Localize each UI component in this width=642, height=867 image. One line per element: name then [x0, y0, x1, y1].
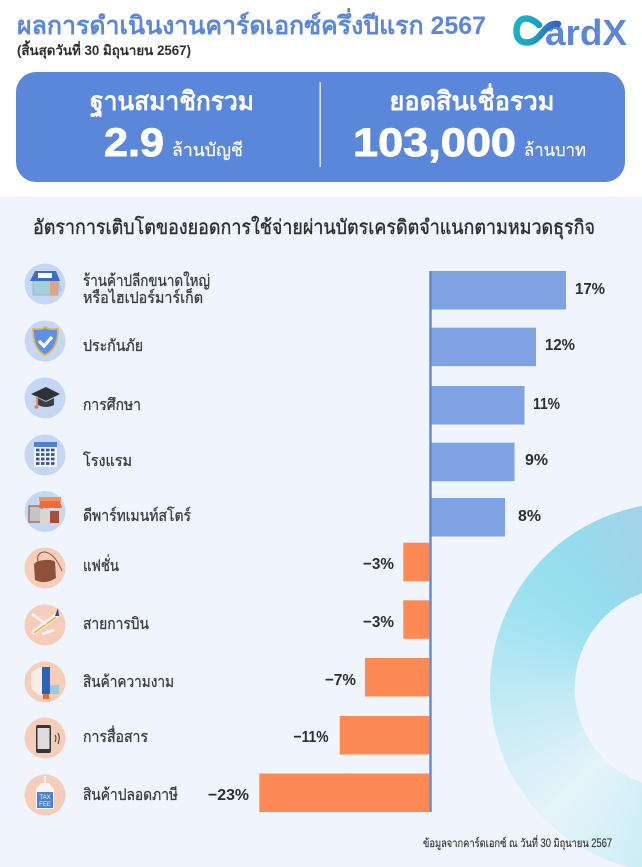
value: 17%: 17%	[575, 281, 605, 298]
chart axis	[429, 271, 432, 812]
bar: telecom -11%	[340, 716, 429, 754]
value: 9%: 9%	[525, 452, 548, 469]
icon: hotel	[24, 434, 66, 476]
bar: department store 8%	[431, 498, 505, 536]
value: -7%: −7%	[325, 672, 356, 689]
label: fashion: แฟชั่น	[83, 554, 119, 575]
label: retail: ร้านค้าปลีกขนาดใหญ่	[83, 271, 210, 290]
bar: duty free -23%	[259, 774, 429, 812]
stat heading: members: ฐานสมาชิกรวม	[90, 86, 254, 119]
label: insurance: ประกันภัย	[83, 338, 143, 355]
bar: insurance 12%	[431, 328, 536, 366]
label: duty free: สินค้าปลอดภาษี	[83, 786, 178, 804]
label: hotel: โรงแรม	[83, 451, 132, 470]
title: ผลการดำเนินงานคาร์ดเอกซ์ครึ่งปีแรก 2567	[17, 8, 486, 40]
icon: smartphone	[24, 718, 66, 758]
panel: summary banner	[16, 72, 625, 182]
bar: education 11%	[431, 386, 524, 424]
stat value: members: 2.9	[104, 121, 164, 165]
bar chart	[259, 271, 566, 812]
value: -3% fashion: −3%	[363, 556, 394, 573]
decorative donut	[490, 503, 642, 867]
icon: tax free tag: TAX	[39, 795, 51, 801]
icon: shop	[24, 264, 66, 304]
icon: shield	[24, 320, 66, 362]
value: 12%: 12%	[545, 337, 575, 354]
label: telecom: การสื่อสาร	[83, 725, 148, 746]
stat unit: credit: ล้านบาท	[524, 140, 586, 160]
label: beauty: สินค้าความงาม	[83, 673, 174, 691]
bar: retail 17%	[431, 271, 566, 310]
icon: department store	[24, 491, 66, 532]
bar: hotel 9%	[431, 443, 514, 481]
subtitle: (สิ้นสุดวันที่ 30 มิถุนายน 2567)	[17, 40, 191, 59]
icon: airplane	[24, 604, 66, 646]
label: airline: สายการบิน	[83, 616, 149, 633]
icon: cosmetics	[24, 662, 66, 702]
value: -23%: −23%	[208, 787, 249, 804]
value: -11%: −11%	[294, 729, 328, 746]
value: -3% airline: −3%	[363, 614, 394, 631]
bar: beauty -7%	[365, 658, 429, 696]
label: department store: ดีพาร์ทเมนท์สโตร์	[83, 506, 191, 525]
label: retail line 2: หรือไฮเปอร์มาร์เก็ต	[83, 287, 203, 307]
icon: handbag	[24, 548, 66, 588]
bar: airline -3%	[403, 600, 429, 639]
icon: tax free tag: FEE	[39, 802, 51, 808]
panel: chart background	[0, 197, 642, 867]
stat heading: credit: ยอดสินเชื่อรวม	[390, 82, 554, 116]
stat unit: members: ล้านบัญชี	[172, 140, 243, 160]
value: 8%: 8%	[518, 508, 541, 525]
logo: CardX: ardX	[545, 12, 627, 53]
divider	[320, 82, 321, 167]
value: 11%: 11%	[533, 396, 560, 413]
icon: tax free tag	[24, 774, 66, 816]
stat value: credit: 103,000	[353, 121, 516, 165]
label: education: การศึกษา	[83, 397, 141, 414]
bar: fashion -3%	[403, 543, 429, 581]
icon: graduation cap	[24, 378, 66, 418]
